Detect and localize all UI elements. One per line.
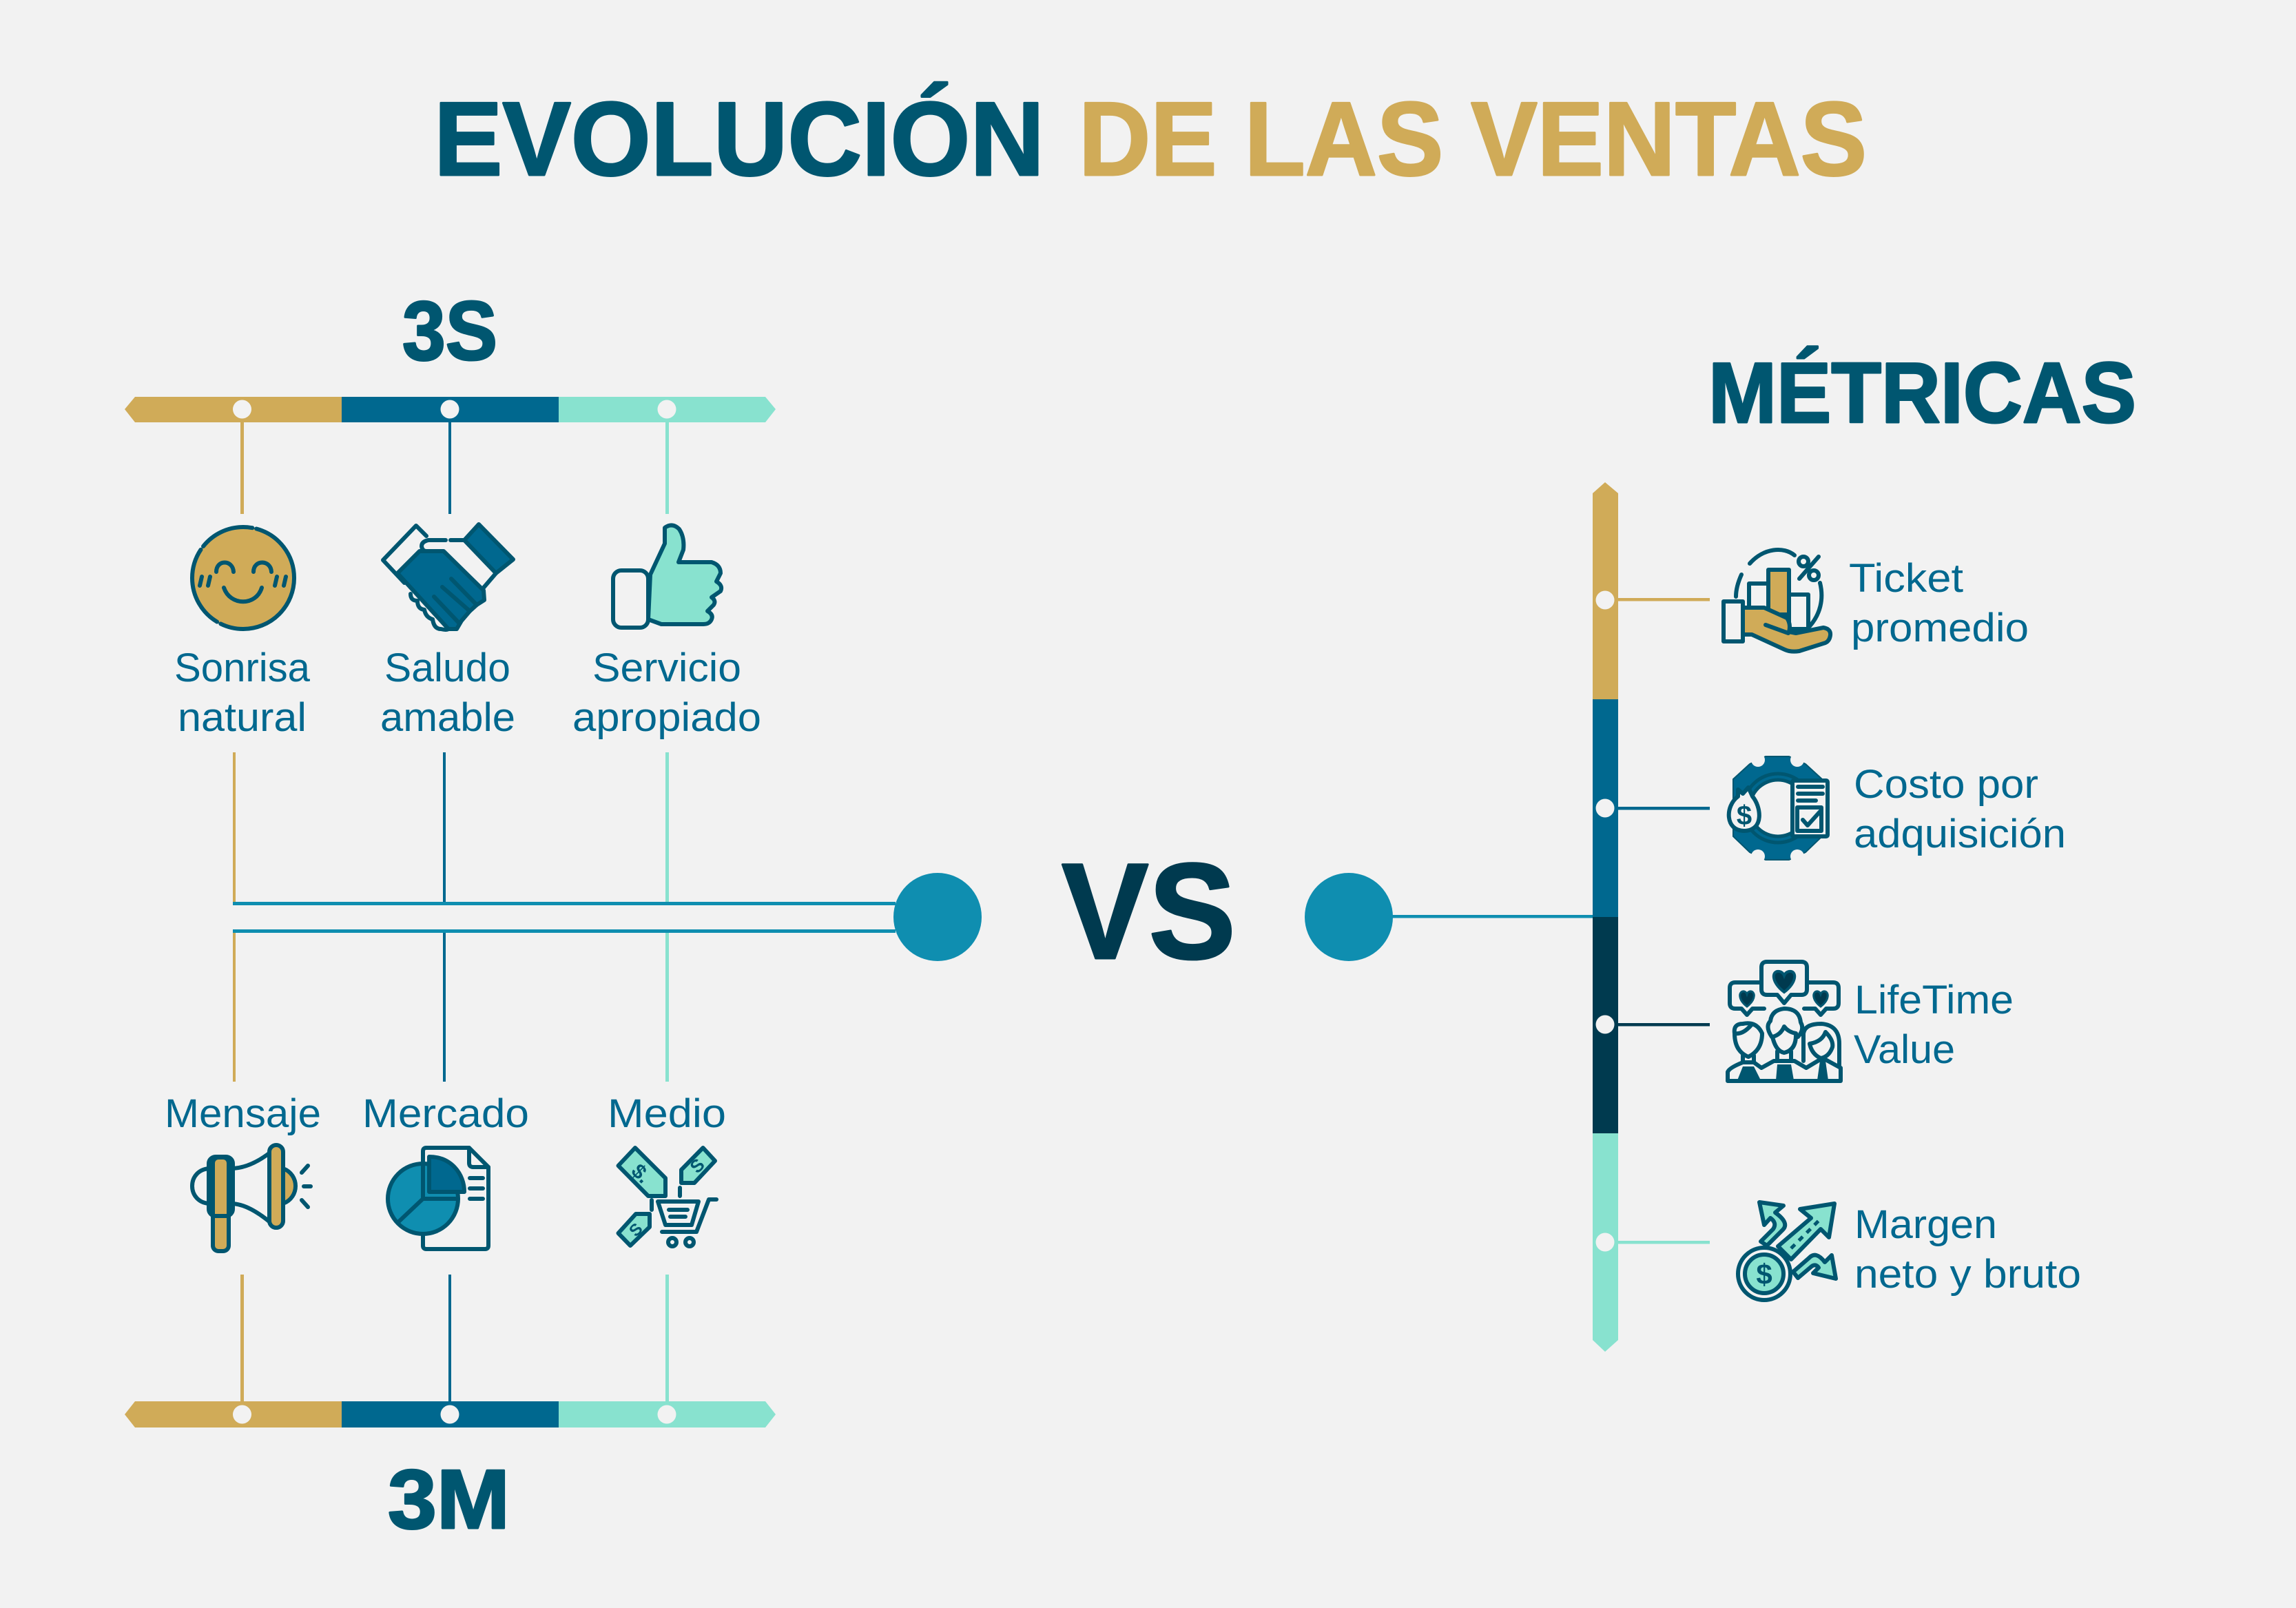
heading: MÉTRICAS: MÉTRICAS [1708,346,2136,441]
label: Sonrisa natural: natural [178,695,307,740]
label: Costo por adquisición: Costo por [1854,762,2038,807]
icon: pie chart document [388,1148,488,1249]
label: Mercado: Mercado [362,1091,529,1136]
label: LifeTime Value: Value [1854,1027,1955,1072]
label: Margen neto y bruto: Margen [1854,1202,1997,1247]
icon: coin with arrows [1738,1202,1836,1300]
connectors between 3S, 3M and VS [233,752,896,1082]
label: Ticket promedio: promedio [1851,606,2029,650]
icon: coin with arrows: $ [1756,1258,1772,1290]
label: Saludo amable [380,646,515,740]
label: Saludo amable: amable [380,695,515,740]
label: Medio: Medio [608,1091,726,1136]
VS heading: VS [1062,835,1236,987]
label: Mensaje: Mensaje [165,1091,321,1136]
label: Margen neto y bruto [1854,1202,2081,1297]
icon: hand with bars and percent [1724,550,1830,652]
label: LifeTime Value [1854,978,2014,1072]
icon: price tags and cart: S [625,1219,647,1241]
label: Sonrisa natural: Sonrisa [174,646,311,690]
label: Servicio apropiado: Servicio [592,646,741,690]
icon: gear with money bag and document [1729,753,1828,863]
panel: 3S timeline bar [125,397,776,514]
icon: price tags and cart: $. [627,1159,655,1188]
label: Servicio apropiado: apropiado [572,695,761,740]
label: Ticket promedio [1849,556,2029,650]
label: Costo por adquisición: adquisición [1854,812,2066,856]
title: EVOLUCIÓN [434,81,1044,198]
panel: metrics vertical bar [1593,482,1710,1352]
right node circle with connector [1305,873,1593,961]
label: Sonrisa natural [174,646,311,740]
label: Ticket promedio: Ticket [1849,556,1963,601]
title: DE LAS VENTAS [1079,81,1867,198]
icon: thumbs up [613,525,721,628]
label: LifeTime Value: LifeTime [1854,978,2014,1022]
icon: gear with money bag and document: $ [1737,801,1752,831]
icon: megaphone [192,1145,311,1251]
left node circle [893,873,982,961]
icon: handshake [383,524,513,630]
title [434,81,1867,198]
label: Servicio apropiado [572,646,761,740]
icon: smiling face [192,526,295,630]
icon: customers with hearts [1728,962,1841,1081]
icon: price tags and cart: S [685,1154,709,1177]
panel: 3M timeline bar [125,1275,776,1427]
label: Margen neto y bruto: neto y bruto [1854,1252,2081,1297]
label: Saludo amable: Saludo [384,646,510,690]
heading: 3S: 3S [402,284,497,378]
label: Costo por adquisición [1854,762,2066,856]
icon: price tags and cart [619,1148,716,1246]
heading: 3M: 3M [388,1452,510,1546]
